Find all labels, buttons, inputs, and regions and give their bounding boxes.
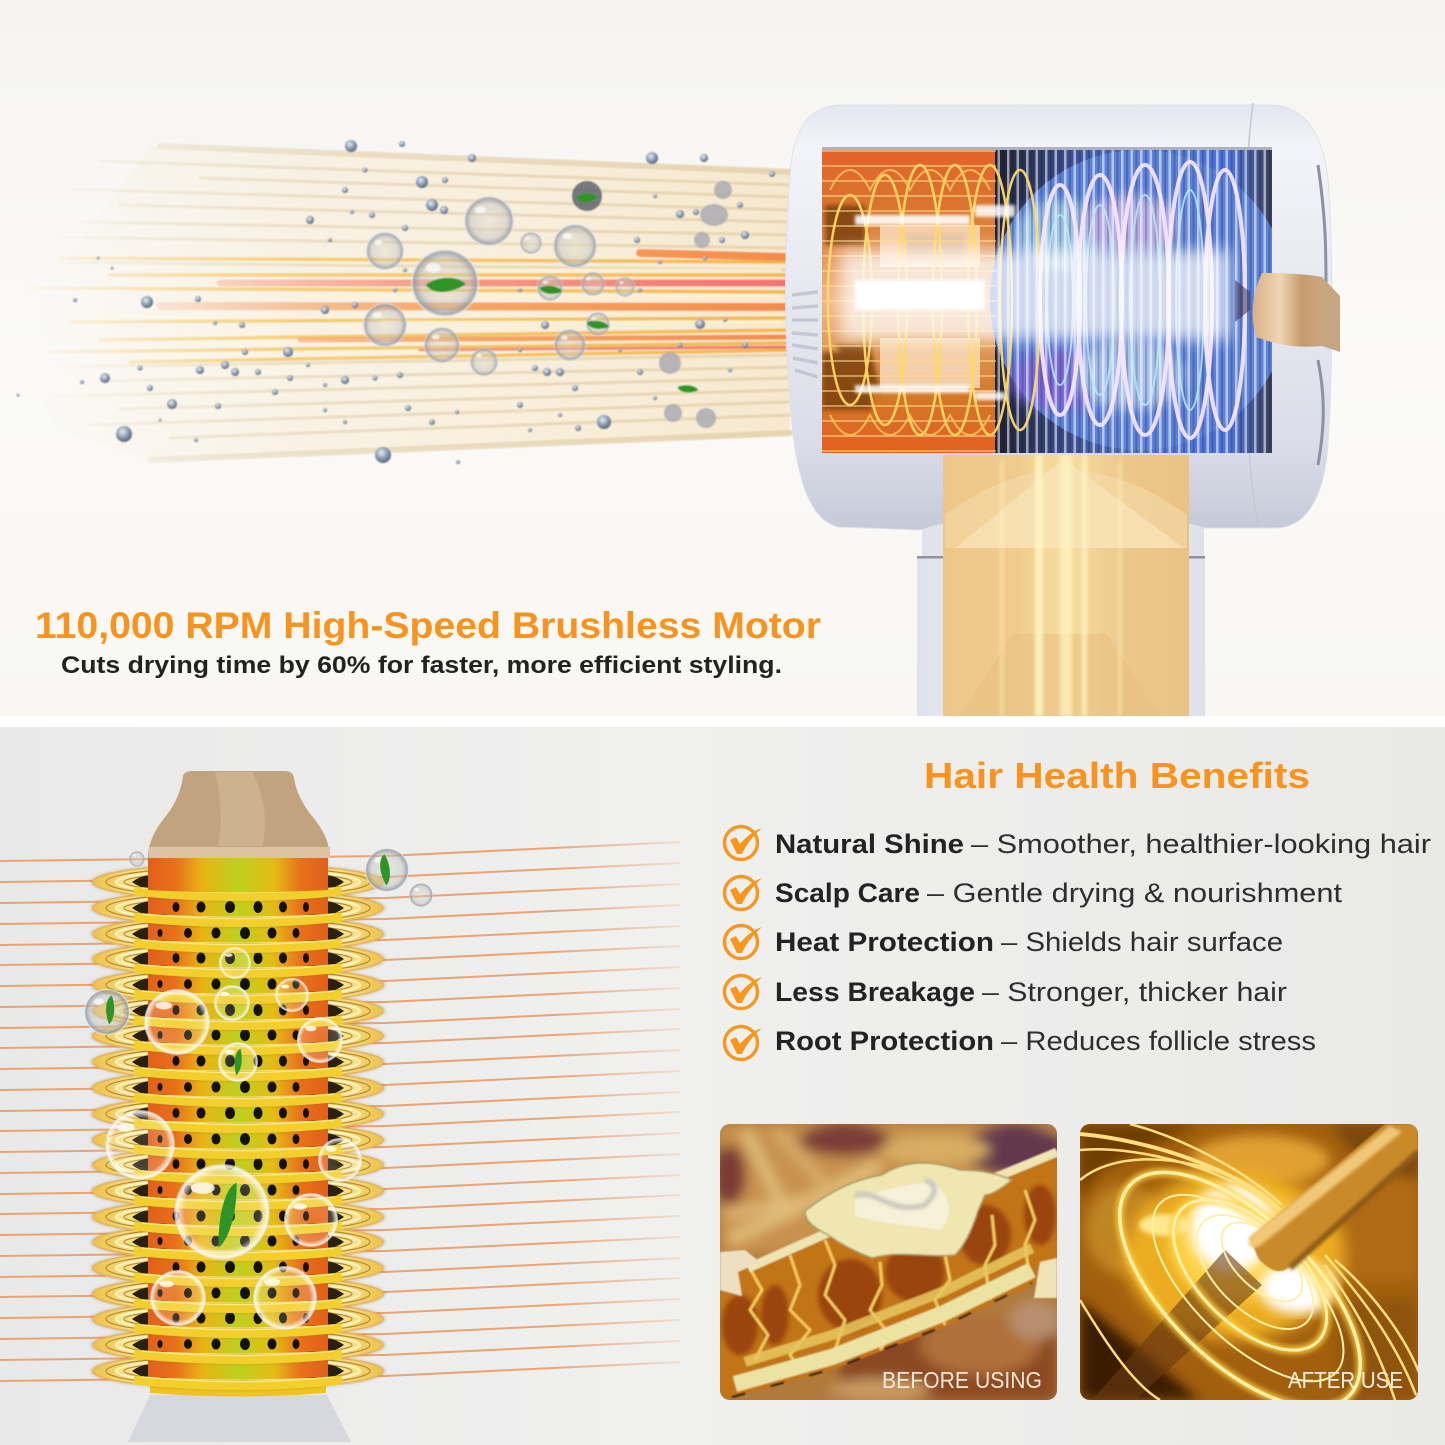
nozzle base <box>128 1395 351 1442</box>
benefit: root protection: Root Protection <box>775 1026 994 1056</box>
lower arrow <box>1018 634 1116 716</box>
violet and pale tints <box>1010 195 1185 410</box>
before using photo <box>714 1124 1065 1402</box>
nozzle bubbles <box>84 848 433 1330</box>
strand cracks <box>732 1283 1032 1397</box>
swirl rings glow <box>1113 1165 1368 1400</box>
shaft shadow <box>1290 1152 1418 1268</box>
blue motor disc <box>990 150 1290 450</box>
after caption: AFTER USE <box>1288 1367 1403 1393</box>
water droplets and bubbles <box>16 140 775 464</box>
residue flake <box>805 1163 1012 1258</box>
benefit: root protection <box>724 1026 1316 1060</box>
bottom panel background <box>0 727 1445 1445</box>
benefit: heat protection <box>724 926 1283 958</box>
nozzle gold cap <box>148 771 330 858</box>
benefit: natural shine: – Smoother, healthier-looking hair <box>971 829 1431 859</box>
magnetic field rings <box>1040 162 1245 438</box>
cream lower rim <box>735 1270 1032 1384</box>
golden lower rim <box>745 1248 1032 1362</box>
benefits heading: Hair Health Benefits <box>924 755 1310 796</box>
benefit: natural shine <box>724 826 1431 860</box>
benefit: scalp care: – Gentle drying & nourishment <box>927 878 1343 908</box>
light beams <box>1000 455 1122 716</box>
before caption: BEFORE USING <box>882 1367 1042 1393</box>
long arcs <box>1080 1124 1420 1400</box>
arch highlight <box>945 470 1187 548</box>
benefit: scalp care: Scalp Care <box>775 878 920 908</box>
motor cutaway window <box>822 150 1290 453</box>
large bubbles <box>363 181 635 376</box>
dryer neck <box>917 500 1205 716</box>
dryer shell vents and seam <box>792 103 1326 525</box>
right flake <box>1034 1258 1057 1298</box>
nozzle core and rings <box>91 858 385 1396</box>
core top collar <box>148 858 328 892</box>
dryer head shell <box>786 105 1332 530</box>
swirl rings <box>1118 1170 1362 1400</box>
benefit: less breakage: – Stronger, thicker hair <box>982 977 1287 1007</box>
window upper rim <box>822 147 1272 150</box>
upward arrow <box>955 459 1184 548</box>
hair strand <box>718 1150 1058 1398</box>
dark brown stator blocks <box>822 205 965 410</box>
title: 110,000 RPM High-Speed Brushless Motor <box>35 605 821 646</box>
dark rear hub <box>1235 280 1250 322</box>
core bottom rim <box>150 1375 326 1396</box>
cool side <box>995 150 1272 453</box>
left flake <box>720 1250 760 1296</box>
coil waves <box>830 170 990 435</box>
orange airflow lines <box>0 842 680 1381</box>
benefit: scalp care <box>724 876 1343 910</box>
upper rim <box>748 1152 1057 1268</box>
benefit: root protection: – Reduces follicle stress <box>1001 1026 1316 1056</box>
airflow streaks <box>10 146 790 460</box>
benefit: less breakage: Less Breakage <box>775 977 975 1007</box>
flake highlight <box>855 1182 949 1230</box>
flake inner shade <box>855 1180 934 1207</box>
benefit: natural shine: Natural Shine <box>775 829 964 859</box>
glowing shaft <box>840 250 1230 340</box>
blurred background <box>714 1124 1065 1402</box>
gap divider background <box>0 716 1445 727</box>
benefit: less breakage <box>724 976 1287 1008</box>
small droplets <box>16 140 775 464</box>
top panel background <box>0 0 1445 716</box>
lower hair strand <box>1092 1250 1262 1400</box>
golden glow <box>1125 1170 1345 1340</box>
pale stator blocks <box>880 225 980 388</box>
jagged scale edges <box>748 1190 1035 1370</box>
gold air column <box>943 455 1189 716</box>
heat side <box>822 150 996 453</box>
dark cuticle patches <box>722 1185 1056 1355</box>
grey translucent drops <box>659 181 732 428</box>
bright hair shaft <box>1250 1124 1418 1271</box>
benefit: heat protection: Heat Protection <box>775 927 994 957</box>
benefit: heat protection: – Shields hair surface <box>1001 927 1283 957</box>
shaft highlight <box>1249 1126 1402 1248</box>
dark vignette <box>1080 1124 1418 1400</box>
coil rings <box>828 165 1040 435</box>
subtitle: Cuts drying time by 60% for faster, more efficient styling. <box>61 652 782 679</box>
after use photo <box>1080 1124 1418 1400</box>
gold clip <box>1253 273 1340 352</box>
leaves in bubbles <box>425 189 698 394</box>
